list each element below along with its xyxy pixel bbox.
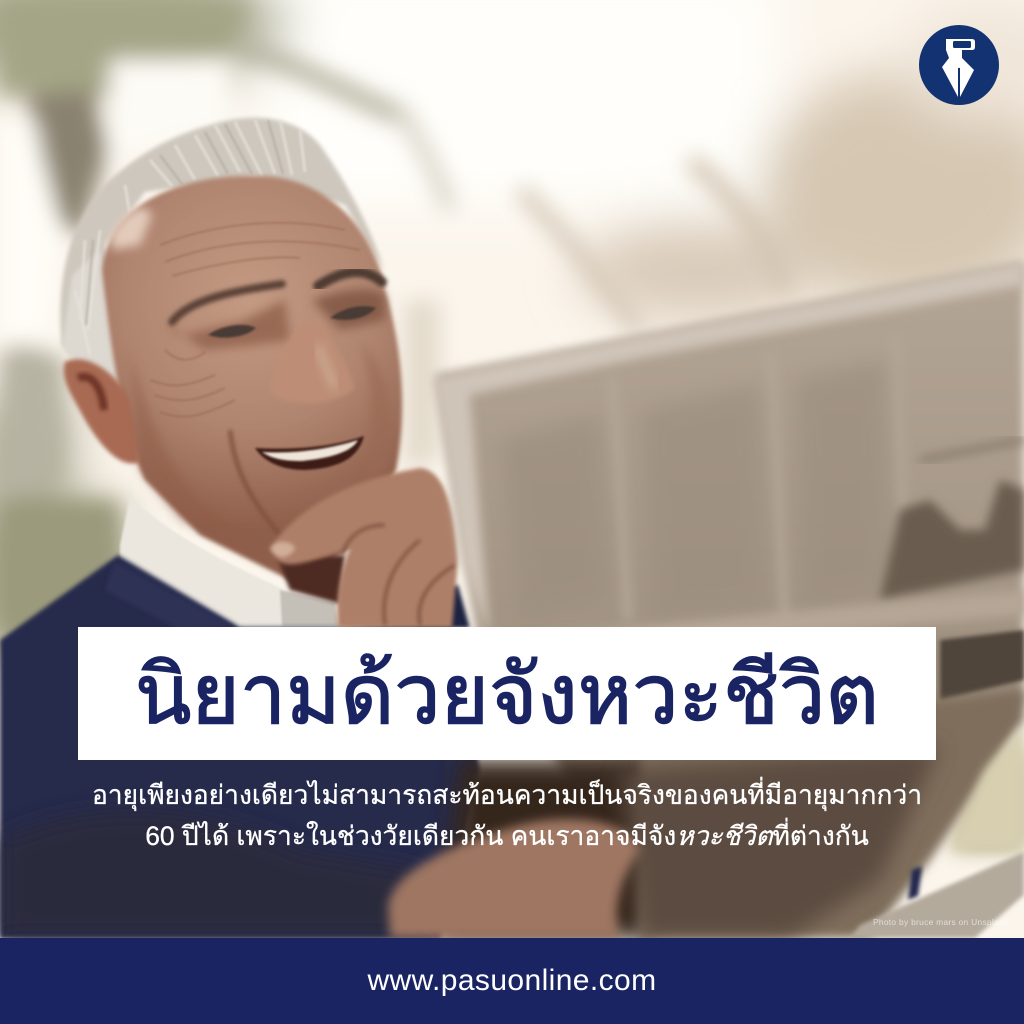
collar xyxy=(120,497,338,626)
footer bar with website: www.pasuonline.com xyxy=(367,964,656,997)
hand at chin xyxy=(270,468,458,628)
facial features: brows, eyes, nose, smile xyxy=(168,272,385,535)
footer bar with website xyxy=(0,938,1024,1024)
hair xyxy=(60,118,384,392)
sweater xyxy=(0,555,480,938)
body text xyxy=(92,776,922,851)
lower dark area and blurred reading hand xyxy=(388,690,1024,938)
logo: navy circle with pen nib xyxy=(919,25,999,105)
face and ear xyxy=(64,176,402,585)
body text: 60 ปีได้ เพราะในช่วงวัยเดียวกัน คนเราอาจมีจังหวะชีวิตที่ต่างกัน xyxy=(145,821,869,851)
body text: อายุเพียงอย่างเดียวไม่สามารถสะท้อนความเป็นจริงของคนที่มีอายุมากกว่า xyxy=(92,780,922,810)
photo credit: Photo by bruce mars on Unsplash xyxy=(873,917,1008,927)
neck shadow xyxy=(278,555,345,604)
title text: นิยามด้วยจังหวะชีวิต xyxy=(135,648,879,741)
newspaper xyxy=(434,262,1024,860)
title banner xyxy=(78,627,936,760)
